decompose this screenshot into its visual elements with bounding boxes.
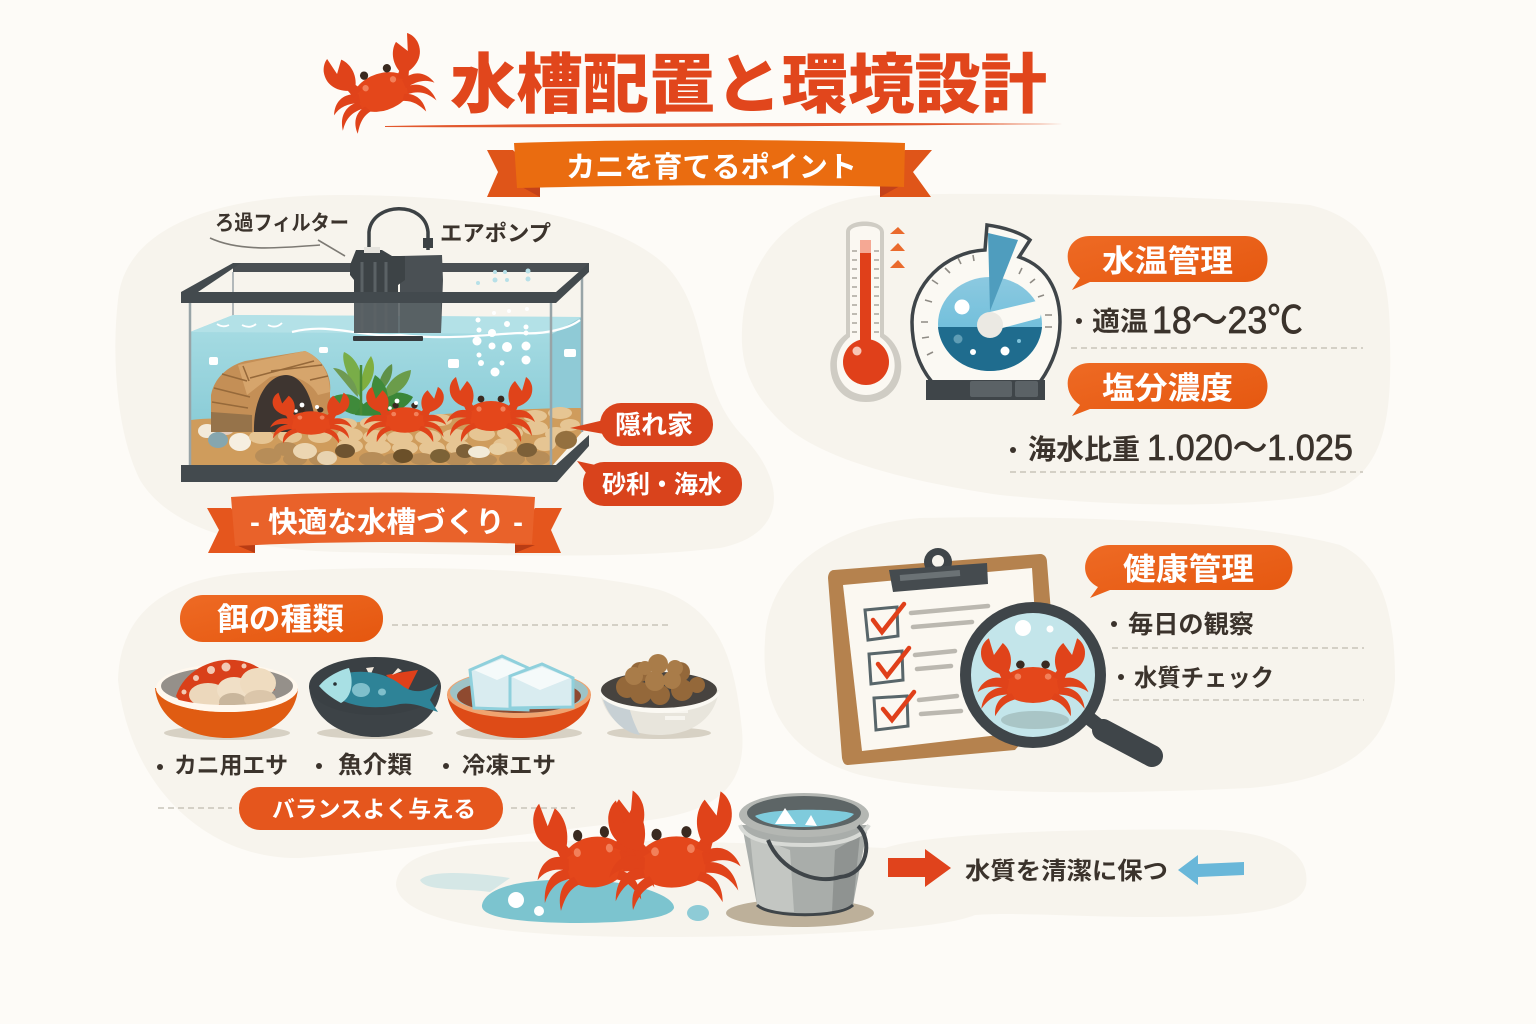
tank front frame (181, 263, 589, 482)
icon: two crabs (527, 789, 744, 914)
callout: hideout: 隠れ家 (615, 410, 693, 440)
filter unit (350, 209, 443, 341)
icon: gauge (912, 225, 1060, 400)
pill: salinity: 塩分濃度 (1102, 371, 1233, 406)
icon: bowl frozen food (447, 656, 591, 740)
crab 3 (447, 377, 535, 442)
icon: clipboard with magnifier (828, 548, 1152, 765)
pill: water temperature (1068, 236, 1268, 290)
air bubbles (472, 307, 530, 376)
magnifier (960, 602, 1152, 756)
floating white flakes (209, 347, 576, 368)
text: temperature range: 18〜23℃ (1152, 300, 1303, 342)
subtitle ribbon: カニを育てるポイント (566, 151, 857, 184)
panel: aquarium background (115, 195, 774, 556)
icon: thermometer (830, 222, 905, 402)
pill: food types: 餌の種類 (217, 602, 344, 637)
pill: health management: 健康管理 (1123, 552, 1254, 587)
callout: gravel and seawater (577, 461, 742, 506)
puddle (420, 873, 709, 923)
food label: frozen food: 冷凍エサ (462, 752, 556, 778)
panel: food background (118, 568, 743, 858)
pill: food types (180, 595, 383, 642)
crab 2 (364, 387, 446, 442)
text: water quality check: 水質チェック (1134, 665, 1274, 692)
left crab (527, 789, 660, 914)
arrow: blue (1178, 855, 1244, 885)
food label: seafood: 魚介類 (338, 752, 412, 779)
icon: bowl crab food (155, 660, 298, 740)
text: daily observation: 毎日の観察 (1128, 611, 1254, 639)
pill: health management (1085, 545, 1292, 598)
icon: bowl pellets (600, 654, 719, 739)
crab under magnifier (978, 638, 1088, 716)
hideout (211, 351, 330, 432)
callout: gravel and seawater: 砂利・海水 (602, 471, 722, 499)
label: air pump: エアポンプ (440, 221, 551, 246)
subtitle ribbon (487, 140, 932, 197)
callout: hideout (570, 403, 713, 446)
label: filter: ろ過フィルター (215, 212, 349, 235)
plants (330, 352, 413, 416)
pill: water temperature: 水温管理 (1102, 244, 1233, 279)
icon: bucket (726, 793, 874, 927)
ribbon: comfortable tank: - 快適な水槽づくり - (250, 506, 523, 539)
gravel (191, 408, 582, 466)
pill: salinity (1068, 363, 1268, 416)
right crab (602, 790, 744, 912)
text: salinity range: 1.020〜1.025 (1147, 427, 1353, 468)
ribbon: comfortable tank (207, 492, 562, 553)
panel: health background (764, 517, 1395, 792)
crabs (270, 377, 535, 443)
text: temperature range (1076, 300, 1303, 342)
pill: balanced feeding (239, 787, 503, 830)
food label: crab food: カニ用エサ (174, 752, 288, 778)
text: salinity range (1010, 427, 1353, 468)
icon: title crab (317, 30, 442, 139)
heading: 水槽配置と環境設計 (450, 48, 1047, 121)
crab 1 (270, 393, 352, 443)
title underline (385, 123, 1063, 127)
title with crab (317, 30, 1047, 139)
panel: water parameters background (742, 194, 1390, 504)
pill: balanced feeding: バランスよく与える (272, 796, 476, 822)
text: keep water clean: 水質を清潔に保つ (965, 858, 1168, 885)
text: temperature range: 適温 (1092, 307, 1148, 337)
tank back frame (233, 263, 589, 272)
icon: bowl seafood (309, 657, 441, 739)
text: salinity range: 海水比重 (1028, 434, 1140, 465)
aquarium illustration (181, 209, 589, 482)
eye highlights (294, 399, 418, 413)
label: filter (210, 212, 349, 256)
water (190, 315, 582, 465)
clipboard (828, 548, 1058, 765)
panel: water quality background (396, 830, 1306, 937)
arrow: red (888, 849, 951, 887)
